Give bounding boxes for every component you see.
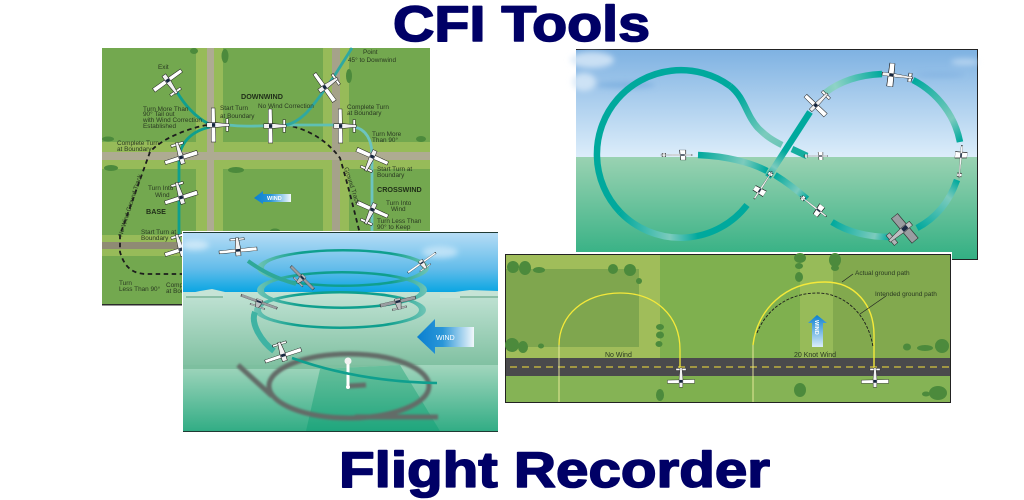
course labels: Start Turn (220, 105, 249, 112)
course labels: Complete Turn (117, 140, 159, 147)
plane: far right (953, 145, 968, 178)
plane: crosswind one (350, 143, 390, 178)
course labels: Ground Track (342, 166, 361, 206)
panel: lazy eight diagram (570, 49, 979, 260)
course labels: Wind (155, 192, 170, 199)
plane: no wind (667, 368, 695, 387)
course labels: CROSSWIND (377, 185, 422, 194)
plane: bottom (261, 336, 303, 367)
plane: top right (881, 62, 914, 89)
course labels: Turn Into (386, 200, 412, 207)
plane: with wind (861, 368, 889, 387)
pylon (344, 358, 352, 389)
course labels: Than 90° (372, 136, 398, 144)
course labels: BASE (146, 207, 166, 216)
plane: downwind one (207, 108, 229, 142)
s-turn labels (605, 270, 937, 359)
wind arrow: WIND (436, 335, 455, 342)
plane: rear (286, 264, 316, 294)
plane: right side (380, 294, 417, 313)
s-turn labels: Actual ground path (855, 270, 910, 277)
course labels: Boundary (377, 172, 405, 179)
ground track: no wind (559, 293, 680, 368)
course labels: Exit (158, 64, 169, 71)
plane: right banked (406, 251, 440, 278)
ground shadow (238, 354, 438, 418)
plane: descending left (749, 168, 777, 202)
course labels: No Wind Ground Track (117, 173, 144, 238)
wind arrow (417, 319, 474, 354)
s-turn labels: Intended ground path (875, 291, 937, 298)
leader lines (842, 274, 886, 314)
course labels: Turn Into (148, 185, 174, 192)
ground track: dashed (120, 125, 360, 274)
plane: lower right grey (879, 211, 921, 253)
ground fields (183, 365, 498, 431)
wind arrow: WIND (813, 320, 819, 335)
plane: base two (160, 177, 199, 209)
clouds and horizon hills (181, 240, 498, 298)
field patches (506, 255, 950, 402)
course labels: Boundary (141, 235, 169, 242)
ground track: intended (757, 293, 873, 347)
plane: climbing (801, 84, 837, 120)
course labels: with Wind Correction (142, 117, 202, 124)
runway (506, 358, 950, 376)
course labels: Start Turn at (377, 166, 412, 173)
course labels: Less Than 90° (119, 285, 161, 293)
course labels: No Wind Correction (258, 103, 314, 110)
plane: entry (150, 65, 191, 103)
course labels: DOWNWIND (241, 92, 283, 101)
plane: left nose-on (239, 293, 278, 314)
course labels: 90° Tail out (143, 110, 175, 118)
course labels: Turn (119, 280, 132, 287)
course labels: 45° to Downwind (348, 56, 396, 64)
trees (505, 253, 949, 401)
flight path (177, 48, 372, 240)
course labels: Turn More Than (143, 106, 189, 113)
clouds (570, 52, 979, 91)
course labels: Complete (166, 282, 194, 289)
ground track: actual with wind (753, 282, 874, 368)
pale extension lines (559, 343, 753, 402)
entry and exit paths (248, 261, 437, 383)
plane: crosswind two (350, 196, 390, 231)
s-turn labels: 20 Knot Wind (794, 352, 836, 359)
course labels: Point (363, 49, 378, 56)
course labels: Wind (391, 206, 406, 213)
s-turn labels: No Wind (605, 352, 632, 359)
panel: turns around a point (181, 231, 499, 433)
course labels: 90° to Keep (377, 223, 411, 231)
course labels: Established (143, 123, 176, 130)
panel: s-turns diagram (504, 252, 952, 404)
wind arrow (808, 315, 827, 347)
course labels: at Boundary (117, 146, 152, 153)
plane: descending right (797, 192, 830, 221)
plane: level centre (804, 152, 828, 160)
panel: rectangular course diagram (102, 48, 430, 306)
plane: downwind three (334, 109, 356, 143)
plane: base three (160, 229, 199, 261)
spiral flight path: three turns (254, 249, 429, 329)
plane: top left (218, 236, 257, 257)
title: Flight Recorder: Flight Recorder (339, 442, 770, 498)
road grid (102, 48, 430, 305)
course labels: Turn More (372, 131, 402, 138)
course labels (117, 49, 422, 295)
plane: exit turn (309, 64, 347, 105)
plane: base one (160, 137, 199, 169)
plane: level left (661, 150, 692, 160)
course labels: Start Turn at (141, 229, 176, 236)
course labels: at Boundary (347, 110, 382, 117)
trees (102, 48, 426, 234)
course labels: at Boundary (166, 288, 201, 295)
wind arrow: WIND (267, 196, 282, 202)
course labels: Turn Less Than (377, 218, 422, 225)
course labels: Complete Turn (347, 104, 389, 111)
wind arrow (254, 191, 291, 204)
course labels: at Boundary (220, 113, 255, 120)
figure eight path (597, 70, 960, 238)
plane: downwind two (264, 109, 286, 143)
